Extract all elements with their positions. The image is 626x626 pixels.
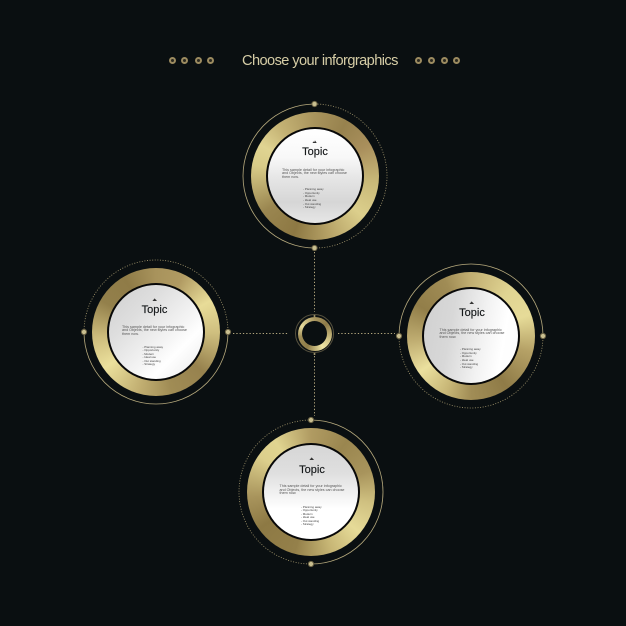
icon xyxy=(470,301,474,304)
icon xyxy=(310,457,314,460)
gold ring xyxy=(247,428,375,556)
gold ring xyxy=(251,112,379,240)
list: - Planning away xyxy=(460,347,481,351)
list xyxy=(303,187,324,209)
panel: left topic circle xyxy=(80,260,232,404)
heading: Topic xyxy=(459,307,485,319)
connector lines: dotted cross xyxy=(233,252,395,416)
paragraph: This sample detail for your infographic xyxy=(282,168,344,172)
list: - Out standing xyxy=(301,519,319,523)
list: - Ideal use xyxy=(142,355,156,359)
paragraph: This sample detail for your infographic xyxy=(440,328,502,332)
paragraph: and Objects, the new styles can choose xyxy=(122,328,187,332)
paragraph: them now. xyxy=(280,491,296,495)
center ring xyxy=(295,314,334,353)
list: - Out standing xyxy=(460,362,478,366)
paragraph: and Objects, the new styles can choose xyxy=(282,171,347,175)
panel: top topic circle xyxy=(242,100,388,252)
list: - Ideal use xyxy=(303,198,316,202)
paragraph xyxy=(440,328,504,339)
list xyxy=(301,504,322,526)
list: - Strategy xyxy=(460,365,473,369)
list: - Planning away xyxy=(303,187,324,191)
paragraph xyxy=(280,484,344,495)
orbit with nodes xyxy=(238,416,384,568)
icon xyxy=(152,298,157,301)
disc xyxy=(264,445,358,539)
paragraph: them now. xyxy=(122,332,139,336)
right dots xyxy=(415,57,460,64)
list: - Out standing xyxy=(142,359,161,363)
panel: right topic circle xyxy=(396,264,546,408)
list xyxy=(460,347,481,369)
left dots xyxy=(169,57,214,64)
gold ring xyxy=(92,268,220,396)
paragraph: This sample detail for your infographic xyxy=(122,324,184,328)
icon xyxy=(312,140,317,143)
list: - Strategy xyxy=(303,205,316,209)
list: - Modern xyxy=(301,512,313,516)
panel: bottom topic circle xyxy=(238,416,384,568)
paragraph xyxy=(122,324,187,336)
list: - Opportunity xyxy=(303,191,320,195)
header: title with dot rows xyxy=(169,53,460,69)
list xyxy=(142,344,163,366)
list: - Modern xyxy=(460,354,472,358)
paragraph: This sample detail for your infographic xyxy=(280,484,342,488)
list: - Planning away xyxy=(142,344,163,348)
list: - Opportunity xyxy=(301,508,318,512)
list: - Modern xyxy=(142,352,154,356)
gold ring xyxy=(407,272,535,400)
list: - Ideal use xyxy=(460,358,474,362)
list: - Modern xyxy=(303,194,315,198)
list: - Opportunity xyxy=(460,351,477,355)
paragraph: them now. xyxy=(282,175,299,179)
list: - Strategy xyxy=(142,362,155,366)
heading: Topic xyxy=(302,146,328,158)
disc xyxy=(268,129,362,223)
disc xyxy=(108,285,202,379)
list: - Strategy xyxy=(301,522,314,526)
paragraph: them now. xyxy=(440,335,456,339)
orbit with nodes xyxy=(242,100,388,252)
disc xyxy=(424,289,518,383)
orbit with nodes xyxy=(80,260,232,404)
list: - Planning away xyxy=(301,504,322,508)
list: - Opportunity xyxy=(142,348,159,352)
paragraph xyxy=(282,168,347,179)
title: Choose your inforgraphics xyxy=(242,53,398,69)
list: - Out standing xyxy=(303,202,321,206)
list: - Ideal use xyxy=(301,515,314,519)
paragraph: and Objects, the new styles can choose xyxy=(440,331,504,335)
orbit with nodes xyxy=(396,264,546,408)
heading: Topic xyxy=(299,464,325,476)
heading: Topic xyxy=(142,304,167,316)
paragraph: and Objects, the new styles can choose xyxy=(280,488,344,492)
